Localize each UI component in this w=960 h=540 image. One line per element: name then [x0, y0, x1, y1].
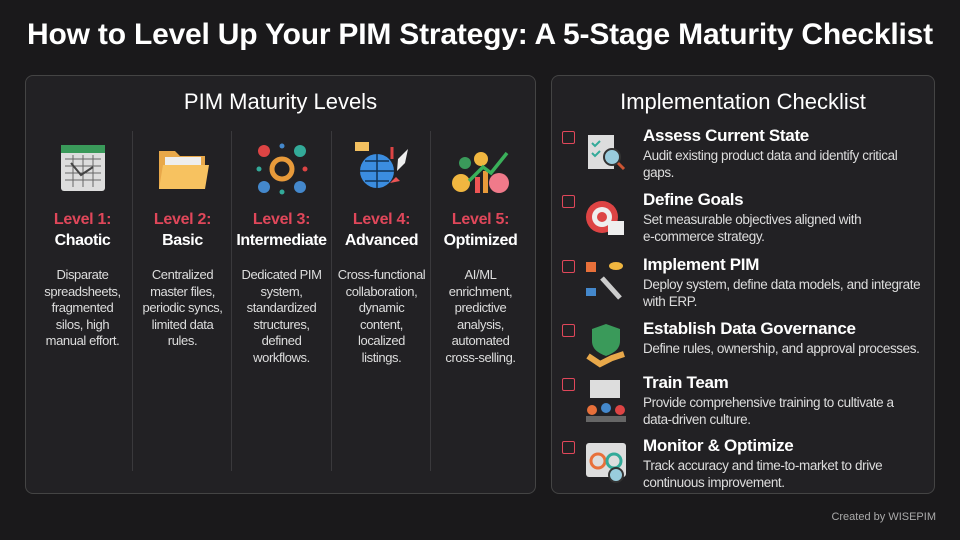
column: level 4: dynamic — [359, 300, 404, 315]
icon: spreadsheet — [61, 145, 105, 191]
icon: team book — [586, 380, 626, 422]
item: implement: Implement PIM — [643, 255, 759, 274]
icon: target — [586, 201, 624, 235]
panel: maturity levels — [25, 75, 536, 494]
column: level 5 — [444, 152, 517, 364]
column: level 1: spreadsheets, — [44, 284, 121, 298]
column: level 1: manual effort. — [46, 333, 119, 348]
item: implement: with ERP. — [643, 294, 697, 309]
column: level 1: fragmented — [52, 300, 113, 315]
column: level 5: Level 5: — [452, 211, 509, 228]
column: level 3: defined — [262, 333, 301, 348]
item: goals: e-commerce strategy. — [643, 229, 765, 244]
icon: gear network — [256, 144, 308, 194]
heading: checklist: Implementation Checklist — [620, 89, 866, 114]
item: monitor: continuous improvement. — [643, 475, 785, 490]
item: monitor — [562, 436, 882, 490]
column: level 5: enrichment, — [449, 284, 512, 298]
column: level 1: Level 1: — [54, 211, 111, 228]
item: assess: Assess Current State — [643, 126, 809, 145]
column: level 1 — [44, 145, 121, 348]
item: goals: Define Goals — [643, 190, 743, 209]
item: train: Train Team — [643, 373, 728, 392]
item: governance: Define rules, ownership, and approval processes. — [643, 341, 919, 356]
item: monitor: Track accuracy and time-to-market to drive — [643, 458, 882, 473]
column: level 2: Basic — [162, 232, 203, 249]
column: level 4: Cross-functional — [338, 267, 425, 282]
column: level 4: Advanced — [345, 232, 418, 249]
column: level 2: rules. — [168, 333, 197, 348]
item: implement — [562, 255, 920, 309]
column: level 3: standardized — [247, 300, 316, 315]
column: level 4: collaboration, — [346, 284, 417, 298]
column: level 2: limited data — [152, 316, 213, 332]
column: level 3: system, — [260, 284, 302, 298]
column: level 2 — [142, 151, 222, 348]
item: assess — [562, 126, 897, 180]
item: train: data-driven culture. — [643, 412, 751, 427]
panel: implementation checklist — [551, 75, 935, 494]
heading: maturity levels: PIM Maturity Levels — [184, 89, 377, 114]
footer credit: Created by WISEPIM — [831, 511, 936, 523]
column: level 3 — [236, 144, 327, 364]
column: level 4: localized — [358, 333, 405, 348]
icon: dashboard — [586, 443, 626, 483]
icon: wrench — [586, 262, 623, 300]
column: level 3: structures, — [253, 316, 310, 332]
item: goals — [562, 190, 861, 244]
column: level 3: Dedicated PIM — [241, 267, 322, 282]
item: assess: gaps. — [643, 165, 674, 180]
column: level 5: cross-selling. — [445, 350, 516, 364]
column: level 1: Chaotic — [55, 232, 110, 249]
column: level 2: periodic syncs, — [142, 300, 222, 315]
column: level 3: workflows. — [253, 350, 310, 364]
column: level 1: Disparate — [56, 267, 109, 282]
item: assess: Audit existing product data and identify critical — [643, 148, 897, 163]
icon: folder — [159, 151, 209, 189]
icon: globe rocket — [355, 142, 408, 188]
item: governance — [562, 319, 919, 368]
column: level 2: master files, — [150, 284, 215, 298]
item: train — [562, 373, 894, 427]
title: How to Level Up Your PIM Strategy: A 5-Stage Maturity Checklist — [27, 18, 933, 51]
icon: clipboard — [588, 135, 625, 170]
column: level 5: AI/ML — [465, 267, 496, 282]
item: monitor: Monitor & Optimize — [643, 436, 793, 455]
column: level 2: Centralized — [152, 267, 213, 282]
column: level 5: analysis, — [457, 316, 504, 332]
column: level 4: Level 4: — [353, 211, 410, 228]
column: level 4 — [338, 142, 425, 364]
column: level 4: listings. — [362, 350, 401, 364]
column: level 4: content, — [360, 316, 403, 332]
icon: shield handshake — [586, 324, 625, 368]
column: level 3: Intermediate — [236, 232, 327, 249]
column: level 5: automated — [452, 333, 509, 348]
item: implement: Deploy system, define data models, and integrate — [643, 277, 920, 292]
column: level 5: predictive — [455, 300, 506, 315]
column: level 5: Optimized — [444, 232, 517, 249]
item: governance: Establish Data Governance — [643, 319, 856, 338]
column: level 1: silos, high — [56, 316, 109, 332]
item: goals: Set measurable objectives aligned with — [643, 212, 861, 227]
column: level 2: Level 2: — [154, 211, 211, 228]
column: level 3: Level 3: — [253, 211, 310, 228]
icon: money growth brain — [452, 152, 509, 193]
item: train: Provide comprehensive training to cultivate a — [643, 395, 894, 410]
